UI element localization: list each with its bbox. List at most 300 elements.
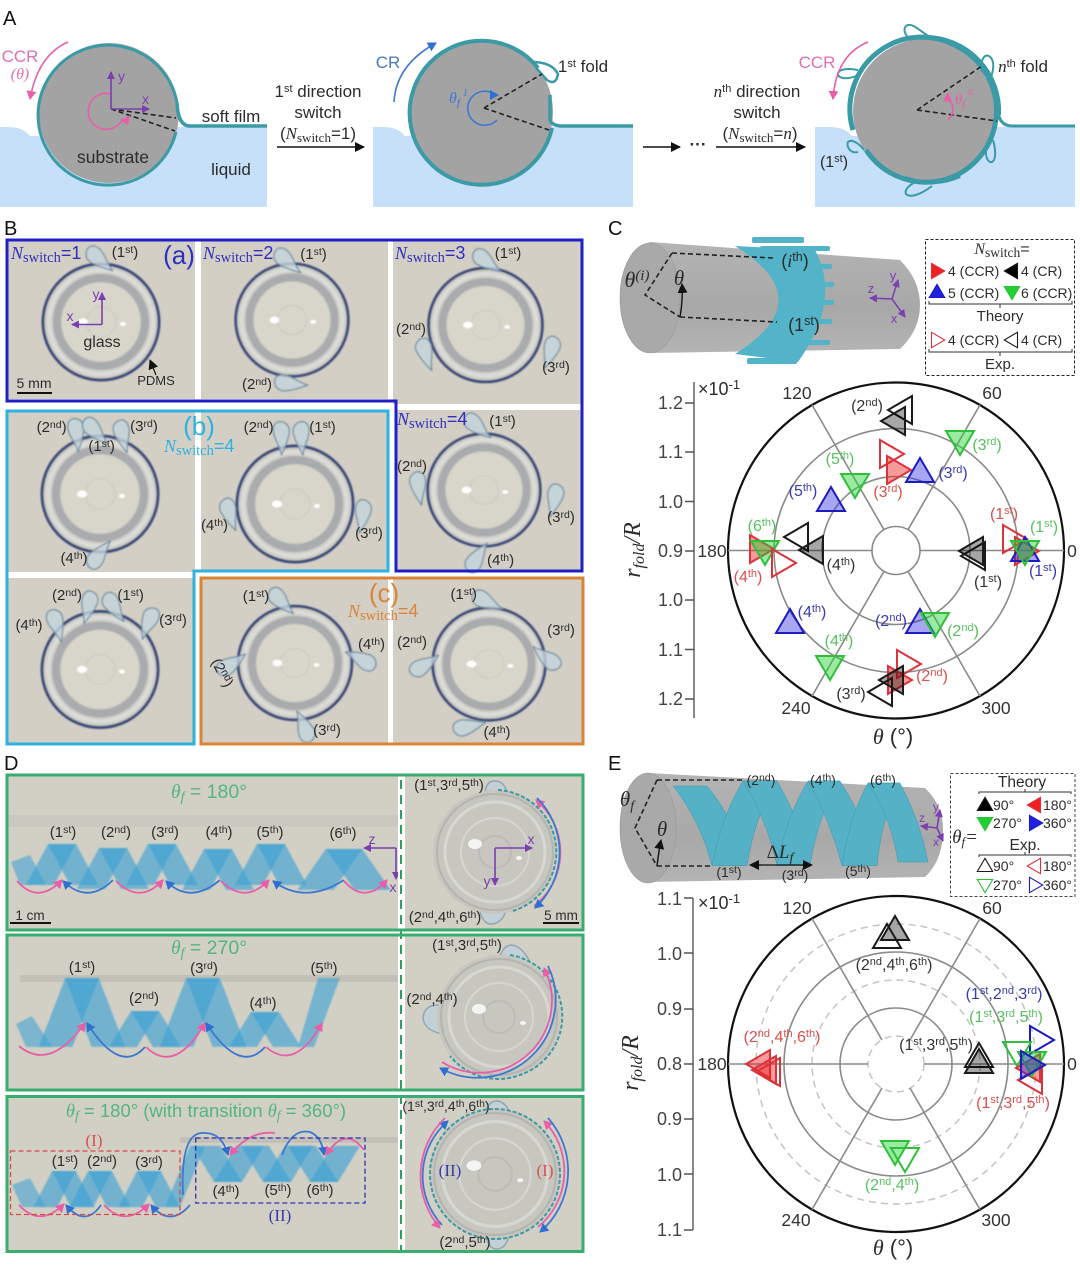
marker labels E: st bbox=[990, 1094, 999, 1106]
photo row 1: x bbox=[528, 831, 534, 847]
heading: panel C: C bbox=[608, 218, 622, 240]
cylinder labels: th bbox=[792, 250, 803, 264]
fold order labels D: ,4 bbox=[444, 1098, 456, 1114]
labels 1 bbox=[2, 42, 260, 179]
fold order labels: (2 bbox=[207, 656, 229, 675]
marker labels E: (1 bbox=[976, 1095, 990, 1112]
marker labels E: st bbox=[980, 985, 988, 997]
fold order labels: st bbox=[508, 245, 516, 257]
marker labels C: ) bbox=[1013, 506, 1018, 523]
panel E: cylinder schematic bbox=[620, 772, 943, 883]
frame (c) bbox=[201, 578, 583, 744]
group labels: N bbox=[10, 243, 24, 263]
group labels: (c) bbox=[369, 578, 399, 608]
y axis C: 1.0 bbox=[658, 590, 683, 610]
marker labels E: nd bbox=[758, 1028, 770, 1040]
angle labels E: 120 bbox=[782, 898, 812, 918]
marker labels E: st bbox=[913, 1036, 922, 1048]
marker labels C: th bbox=[839, 632, 848, 644]
fold order labels: (4 bbox=[487, 552, 500, 569]
photo row 1: y bbox=[484, 873, 490, 889]
fold order labels: nd bbox=[255, 376, 267, 388]
fold order labels D: st bbox=[82, 959, 90, 971]
legend E: 360° bbox=[1043, 877, 1072, 893]
discs and folds bbox=[42, 244, 569, 745]
fold order labels D: ) bbox=[453, 991, 458, 1008]
frame titles: f bbox=[75, 1108, 81, 1123]
fold order labels: rd bbox=[144, 418, 153, 430]
marker labels E: th bbox=[905, 1176, 914, 1188]
cylinder labels: (5 bbox=[845, 863, 858, 879]
legend C: 4 (CCR) bbox=[948, 263, 999, 279]
marker labels C: ) bbox=[821, 604, 826, 621]
marker labels C: th bbox=[803, 482, 812, 494]
group labels: switch bbox=[407, 250, 446, 266]
y axis C: /R bbox=[620, 522, 646, 546]
fold order labels D: ,4 bbox=[434, 909, 446, 926]
angle labels E: 240 bbox=[781, 1210, 811, 1230]
fold order labels D: rd bbox=[164, 824, 174, 836]
labels 2: 1 bbox=[558, 57, 567, 76]
y axis C: 1.1 bbox=[658, 442, 683, 462]
glass annotations: y bbox=[92, 286, 100, 302]
switch arrow n bbox=[714, 82, 805, 147]
fold order labels: ) bbox=[511, 413, 516, 430]
marker labels E: ,3 bbox=[1014, 986, 1027, 1003]
axes: x bbox=[933, 835, 939, 849]
cylinder body bbox=[620, 242, 920, 353]
fold order labels: (3 bbox=[313, 722, 326, 739]
axes: y bbox=[890, 268, 897, 283]
substrate disc with film 1: x bbox=[142, 91, 149, 107]
switch arrow 1: (N bbox=[280, 124, 297, 143]
fold order labels D: nd bbox=[142, 990, 154, 1002]
fold order labels D: ) bbox=[479, 777, 484, 794]
switch arrow 1: 1 bbox=[274, 82, 284, 101]
labels 2: fold bbox=[576, 57, 608, 76]
marker labels E: ,3 bbox=[922, 1037, 935, 1054]
fold order labels D: rd bbox=[448, 777, 458, 789]
labels 1: soft film bbox=[202, 107, 260, 126]
y axis E: ×10 bbox=[698, 893, 729, 913]
fold order labels D: th bbox=[226, 1183, 235, 1195]
marker labels C: rd bbox=[953, 464, 962, 476]
fold order labels: th bbox=[214, 517, 223, 529]
glass annotations: 5 mm bbox=[16, 375, 52, 391]
fold order labels D: (1 bbox=[50, 824, 63, 841]
legend E: 180° bbox=[1043, 797, 1072, 813]
fold order labels: ) bbox=[336, 722, 341, 739]
group labels: =2 bbox=[253, 243, 273, 263]
arrow with ellipsis: ··· bbox=[690, 135, 706, 154]
green frames bbox=[7, 775, 583, 1252]
switch arrow n: n) bbox=[783, 124, 798, 143]
fold order labels D: (5 bbox=[310, 960, 324, 977]
fold order labels: ) bbox=[378, 525, 383, 542]
fold order labels: st bbox=[323, 419, 331, 431]
markers C bbox=[750, 396, 1039, 706]
marker labels E: ,5 bbox=[1022, 1095, 1035, 1112]
cylinder end bbox=[620, 773, 676, 883]
fold order labels D: (4 bbox=[249, 995, 263, 1012]
fold order labels D: rd bbox=[466, 937, 476, 949]
marker labels E: ) bbox=[1038, 1009, 1043, 1026]
fold order labels D: th bbox=[343, 825, 352, 837]
cylinder labels: (i bbox=[781, 251, 792, 271]
labels n: CCR bbox=[799, 53, 835, 72]
fold order labels D: st bbox=[428, 777, 436, 789]
marker labels E: rd bbox=[1027, 985, 1037, 997]
marker labels C: (4 bbox=[825, 633, 839, 650]
fold order labels: ) bbox=[153, 418, 158, 435]
marker labels C: ) bbox=[997, 574, 1002, 591]
labels 1: substrate bbox=[77, 147, 149, 167]
cylinder body bbox=[620, 773, 943, 882]
marker labels E: th bbox=[958, 1036, 968, 1048]
fold order labels: ) bbox=[506, 724, 511, 741]
cylinder labels: st bbox=[804, 314, 814, 328]
cylinder labels: θ bbox=[657, 817, 667, 841]
fold order labels D: th bbox=[219, 824, 228, 836]
marker labels C: (3 bbox=[972, 437, 987, 454]
fold order labels: (3 bbox=[547, 622, 560, 639]
fold order labels: (1 bbox=[243, 588, 256, 605]
y axis E bbox=[618, 889, 740, 1240]
fold order labels: (3 bbox=[355, 525, 368, 542]
fold order labels D: rd bbox=[148, 1154, 158, 1166]
fold order labels D: ) bbox=[352, 825, 357, 842]
marker labels C: ) bbox=[878, 398, 883, 415]
marker labels C: (1 bbox=[990, 506, 1004, 523]
switch arrow n: = bbox=[773, 124, 783, 143]
marker labels C: rd bbox=[851, 685, 860, 697]
fold order labels: rd bbox=[368, 525, 378, 537]
angle labels E: θ (°) bbox=[873, 1235, 913, 1260]
panel A: substrate folding schematic bbox=[0, 25, 1075, 207]
fold order labels: ) bbox=[264, 588, 269, 605]
group labels: =4 bbox=[398, 601, 418, 621]
fold order labels: (4 bbox=[15, 617, 29, 634]
angle labels C: θ (°) bbox=[873, 724, 913, 749]
fold order labels: ) bbox=[267, 376, 272, 393]
frame titles: f bbox=[181, 946, 187, 961]
fold order labels: ) bbox=[565, 359, 570, 376]
group labels: =4 bbox=[447, 409, 467, 429]
labels 1: liquid bbox=[211, 160, 251, 179]
fold order labels: rd bbox=[556, 359, 565, 371]
fold order labels D: th bbox=[444, 991, 453, 1003]
fold order labels D: (II) bbox=[439, 1161, 461, 1180]
marker labels C: ) bbox=[860, 686, 866, 703]
frame titles: θ bbox=[66, 1102, 75, 1122]
marker labels C: nd bbox=[889, 612, 902, 624]
marker labels C: st bbox=[988, 573, 997, 585]
glass annotations: glass bbox=[83, 334, 121, 351]
group labels: N bbox=[396, 409, 410, 429]
fold order labels: (4 bbox=[483, 724, 497, 741]
grid E bbox=[728, 896, 1064, 1232]
fold order labels: nd bbox=[410, 458, 422, 470]
fold order labels D: ) bbox=[228, 824, 233, 841]
frame (a) bbox=[7, 240, 582, 571]
marker labels E: ,2 bbox=[988, 986, 1002, 1003]
legend C: 4 (CR) bbox=[1021, 332, 1062, 348]
fold order labels: (1 bbox=[495, 245, 508, 262]
marker labels E: th bbox=[895, 956, 905, 968]
frame titles: θ bbox=[268, 1102, 277, 1122]
labels 1: (θ) bbox=[11, 66, 29, 83]
marker labels E: ) bbox=[1037, 986, 1042, 1003]
fold order labels D: th bbox=[477, 1234, 486, 1246]
liquid bath 2 bbox=[373, 127, 633, 207]
substrate disc with film n: θ bbox=[955, 92, 962, 108]
fold order labels D: st bbox=[63, 824, 71, 836]
fold order labels: rd bbox=[172, 612, 182, 624]
fold order labels D: (1 bbox=[69, 959, 82, 976]
substrate disc with film n: f bbox=[962, 99, 967, 110]
y axis E: 0.9 bbox=[657, 999, 682, 1019]
legend C: = bbox=[1020, 241, 1030, 258]
spiral ribbon bbox=[673, 781, 928, 866]
marker labels E bbox=[744, 956, 1050, 1194]
frame titles: = 180° (with transition bbox=[79, 1100, 268, 1121]
fold order labels: (2 bbox=[37, 419, 50, 436]
cylinder labels: ) bbox=[771, 772, 775, 788]
polar chart C bbox=[620, 377, 1077, 749]
fold order labels D: ,6 bbox=[464, 1098, 476, 1114]
group labels: =3 bbox=[445, 243, 465, 263]
fold order labels: ) bbox=[380, 636, 385, 653]
frame titles: θ bbox=[171, 782, 181, 803]
fold order labels D: ,3 bbox=[436, 777, 448, 794]
panel D: ribbon photographs bbox=[7, 775, 583, 1252]
fold order labels D: (3 bbox=[151, 824, 164, 841]
fold order labels D: ) bbox=[497, 937, 502, 954]
axes: z bbox=[919, 811, 925, 825]
fold order labels D: (2 bbox=[406, 991, 420, 1008]
labels n: (1 bbox=[820, 154, 834, 171]
fold order labels D: ,3 bbox=[454, 937, 466, 954]
guides bbox=[635, 780, 743, 866]
fold order labels: ) bbox=[38, 617, 43, 634]
panel B: top-view photographs bbox=[7, 240, 583, 745]
marker labels C: ) bbox=[771, 518, 776, 535]
fold order labels D: ) bbox=[235, 1183, 240, 1200]
fold order labels D: (2 bbox=[129, 990, 142, 1007]
angle labels E: 180 bbox=[697, 1054, 727, 1074]
marker labels E: ,4 bbox=[891, 1177, 905, 1194]
cylinder labels: (1 bbox=[788, 315, 804, 335]
marker labels E: ) bbox=[927, 957, 932, 974]
marker labels E: ,6 bbox=[793, 1029, 806, 1046]
y axis E: r bbox=[618, 1081, 644, 1091]
group labels: switch bbox=[23, 250, 62, 266]
fold order labels D: ) bbox=[154, 990, 159, 1007]
cylinder labels: rd bbox=[794, 867, 804, 879]
fold order labels: ) bbox=[139, 587, 144, 604]
angle labels E: 60 bbox=[982, 898, 1002, 918]
angle labels C: 240 bbox=[781, 698, 811, 718]
axes: y bbox=[933, 800, 939, 814]
polar chart E bbox=[618, 889, 1077, 1260]
divider strips bbox=[398, 776, 405, 1252]
marker labels C: (6 bbox=[748, 518, 762, 535]
cylinder labels: f bbox=[630, 799, 636, 814]
marker labels C: th bbox=[748, 568, 757, 580]
cylinder labels bbox=[620, 772, 896, 883]
labels n: ) bbox=[843, 154, 848, 171]
marker labels E: ) bbox=[914, 1177, 919, 1194]
marker labels E: ) bbox=[815, 1029, 820, 1046]
group labels: N bbox=[202, 243, 216, 263]
fold order labels D: th bbox=[446, 909, 455, 921]
angle labels C bbox=[697, 383, 1077, 749]
frame (b) bbox=[7, 411, 388, 744]
marker labels C: (4 bbox=[798, 604, 812, 621]
cylinder labels: (3 bbox=[782, 867, 794, 883]
marker labels C: rd bbox=[888, 483, 897, 495]
fold order labels: th bbox=[29, 617, 38, 629]
cylinder labels: nd bbox=[759, 772, 771, 784]
marker labels C: th bbox=[812, 603, 821, 615]
photo row 1: z bbox=[368, 831, 376, 847]
group labels: =1 bbox=[61, 243, 81, 263]
fold order labels: ) bbox=[322, 246, 327, 263]
labels 2 bbox=[376, 43, 608, 102]
group labels: N bbox=[163, 436, 177, 456]
marker labels C: st bbox=[1043, 562, 1052, 574]
fold order labels D: ) bbox=[329, 1182, 334, 1199]
switch arrow 1: switch bbox=[297, 130, 331, 145]
fold order labels: ) bbox=[509, 552, 514, 569]
fold order labels D: th bbox=[320, 1182, 329, 1194]
legend C: N bbox=[973, 241, 986, 258]
marker labels E: st bbox=[983, 1008, 992, 1020]
cylinder labels: ) bbox=[866, 863, 871, 879]
fold order labels: ) bbox=[269, 419, 274, 436]
fold order labels D: th bbox=[468, 909, 476, 921]
angle labels C: 300 bbox=[981, 698, 1011, 718]
marker labels C: th bbox=[841, 556, 850, 568]
marker labels C: (2 bbox=[875, 613, 889, 630]
cylinder labels: ) bbox=[831, 772, 836, 788]
marker labels E: ,3 bbox=[992, 1009, 1005, 1026]
angle arrow bbox=[680, 284, 682, 317]
heading: panel B: B bbox=[4, 218, 17, 240]
marker labels E: (1 bbox=[899, 1037, 913, 1054]
fold order labels D: ) bbox=[333, 960, 338, 977]
marker labels C: ) bbox=[962, 465, 968, 482]
axes bbox=[919, 800, 943, 849]
fold order labels D: ,3 bbox=[423, 1098, 435, 1114]
fold order labels D: ,5 bbox=[458, 777, 470, 794]
marker labels C: ) bbox=[757, 569, 762, 586]
fold order labels D: ) bbox=[158, 1154, 163, 1171]
fold order labels: st bbox=[464, 586, 472, 598]
fold order labels D: (2 bbox=[409, 909, 422, 926]
fold order labels: (1 bbox=[112, 244, 125, 261]
fold order labels D: (II) bbox=[269, 1206, 291, 1225]
legend E: θ bbox=[952, 827, 961, 848]
fold order labels: nd bbox=[410, 634, 422, 646]
frame titles: f bbox=[277, 1108, 283, 1123]
fold order labels: ) bbox=[422, 634, 427, 651]
fold order labels: (3 bbox=[130, 418, 144, 435]
substrate disc with film 1: y bbox=[118, 68, 125, 84]
switch arrow n: (N bbox=[722, 124, 739, 143]
fold order labels: rd bbox=[560, 509, 570, 521]
fold order labels D: (6 bbox=[306, 1182, 320, 1199]
liquid bath 1 bbox=[0, 127, 267, 207]
frame titles: = 180° bbox=[184, 781, 247, 803]
fold order labels D: ,5 bbox=[464, 1234, 477, 1251]
fold order labels: (2 bbox=[397, 458, 410, 475]
marker labels C: ) bbox=[849, 451, 854, 468]
marker labels E: rd bbox=[1012, 1094, 1022, 1106]
fold order labels D: th bbox=[470, 777, 479, 789]
legend C: 4 (CCR) bbox=[948, 332, 999, 348]
group labels: =4 bbox=[214, 436, 234, 456]
fold order labels D: ) bbox=[112, 1153, 117, 1170]
marker labels C: st bbox=[1044, 518, 1053, 530]
marker labels E: (2 bbox=[865, 1177, 879, 1194]
fold order labels: ) bbox=[83, 550, 88, 567]
fold order labels D: th bbox=[270, 824, 279, 836]
fold order labels: (2 bbox=[396, 321, 409, 338]
fold order labels: (1 bbox=[88, 438, 102, 455]
marker labels E: nd bbox=[879, 1176, 891, 1188]
group labels: switch bbox=[360, 608, 399, 624]
fold order labels D: ,4 bbox=[431, 991, 444, 1008]
cylinder labels: st bbox=[729, 864, 737, 876]
fold order labels: ) bbox=[77, 587, 82, 604]
cylinder labels: θ bbox=[620, 787, 630, 811]
fold order labels D: th bbox=[263, 995, 272, 1007]
marker labels C: (1 bbox=[1029, 563, 1043, 580]
marker labels C: nd bbox=[865, 397, 878, 409]
y axis E: /R bbox=[618, 1035, 644, 1059]
cylinder labels: f bbox=[789, 851, 795, 866]
y axis C: 1.1 bbox=[658, 640, 683, 660]
blue fold band bbox=[735, 237, 834, 364]
marker labels E: nd bbox=[1002, 985, 1014, 997]
heading: panel A: A bbox=[3, 8, 17, 30]
fold order labels D: (2 bbox=[439, 1234, 453, 1251]
photo row 1: 5 mm bbox=[544, 908, 578, 923]
y axis C: fold bbox=[631, 543, 648, 568]
markers E bbox=[746, 916, 1054, 1172]
fold order labels D: th bbox=[324, 960, 333, 972]
cylinder labels: ) bbox=[814, 315, 820, 335]
fold order labels D: nd bbox=[420, 991, 432, 1003]
fold order labels: st bbox=[125, 244, 133, 256]
marker labels C: th bbox=[762, 517, 771, 529]
angle labels E: 0 bbox=[1067, 1054, 1077, 1074]
y axis C: 1.0 bbox=[658, 492, 683, 512]
fold order labels: st bbox=[314, 246, 322, 258]
legend E: = bbox=[965, 827, 978, 848]
fold order labels D: st bbox=[65, 1153, 73, 1165]
marker labels C: (2 bbox=[851, 398, 865, 415]
fold order labels: nd bbox=[65, 587, 77, 599]
fold order labels D: nd bbox=[453, 1234, 465, 1246]
substrate disc with film 2: θ bbox=[449, 90, 457, 107]
fold order labels: (3 bbox=[547, 509, 560, 526]
cylinder labels: th bbox=[823, 772, 831, 784]
legend E: 270° bbox=[993, 815, 1022, 831]
marker labels C: ) bbox=[902, 613, 907, 630]
y axis C: ×10 bbox=[698, 379, 729, 399]
